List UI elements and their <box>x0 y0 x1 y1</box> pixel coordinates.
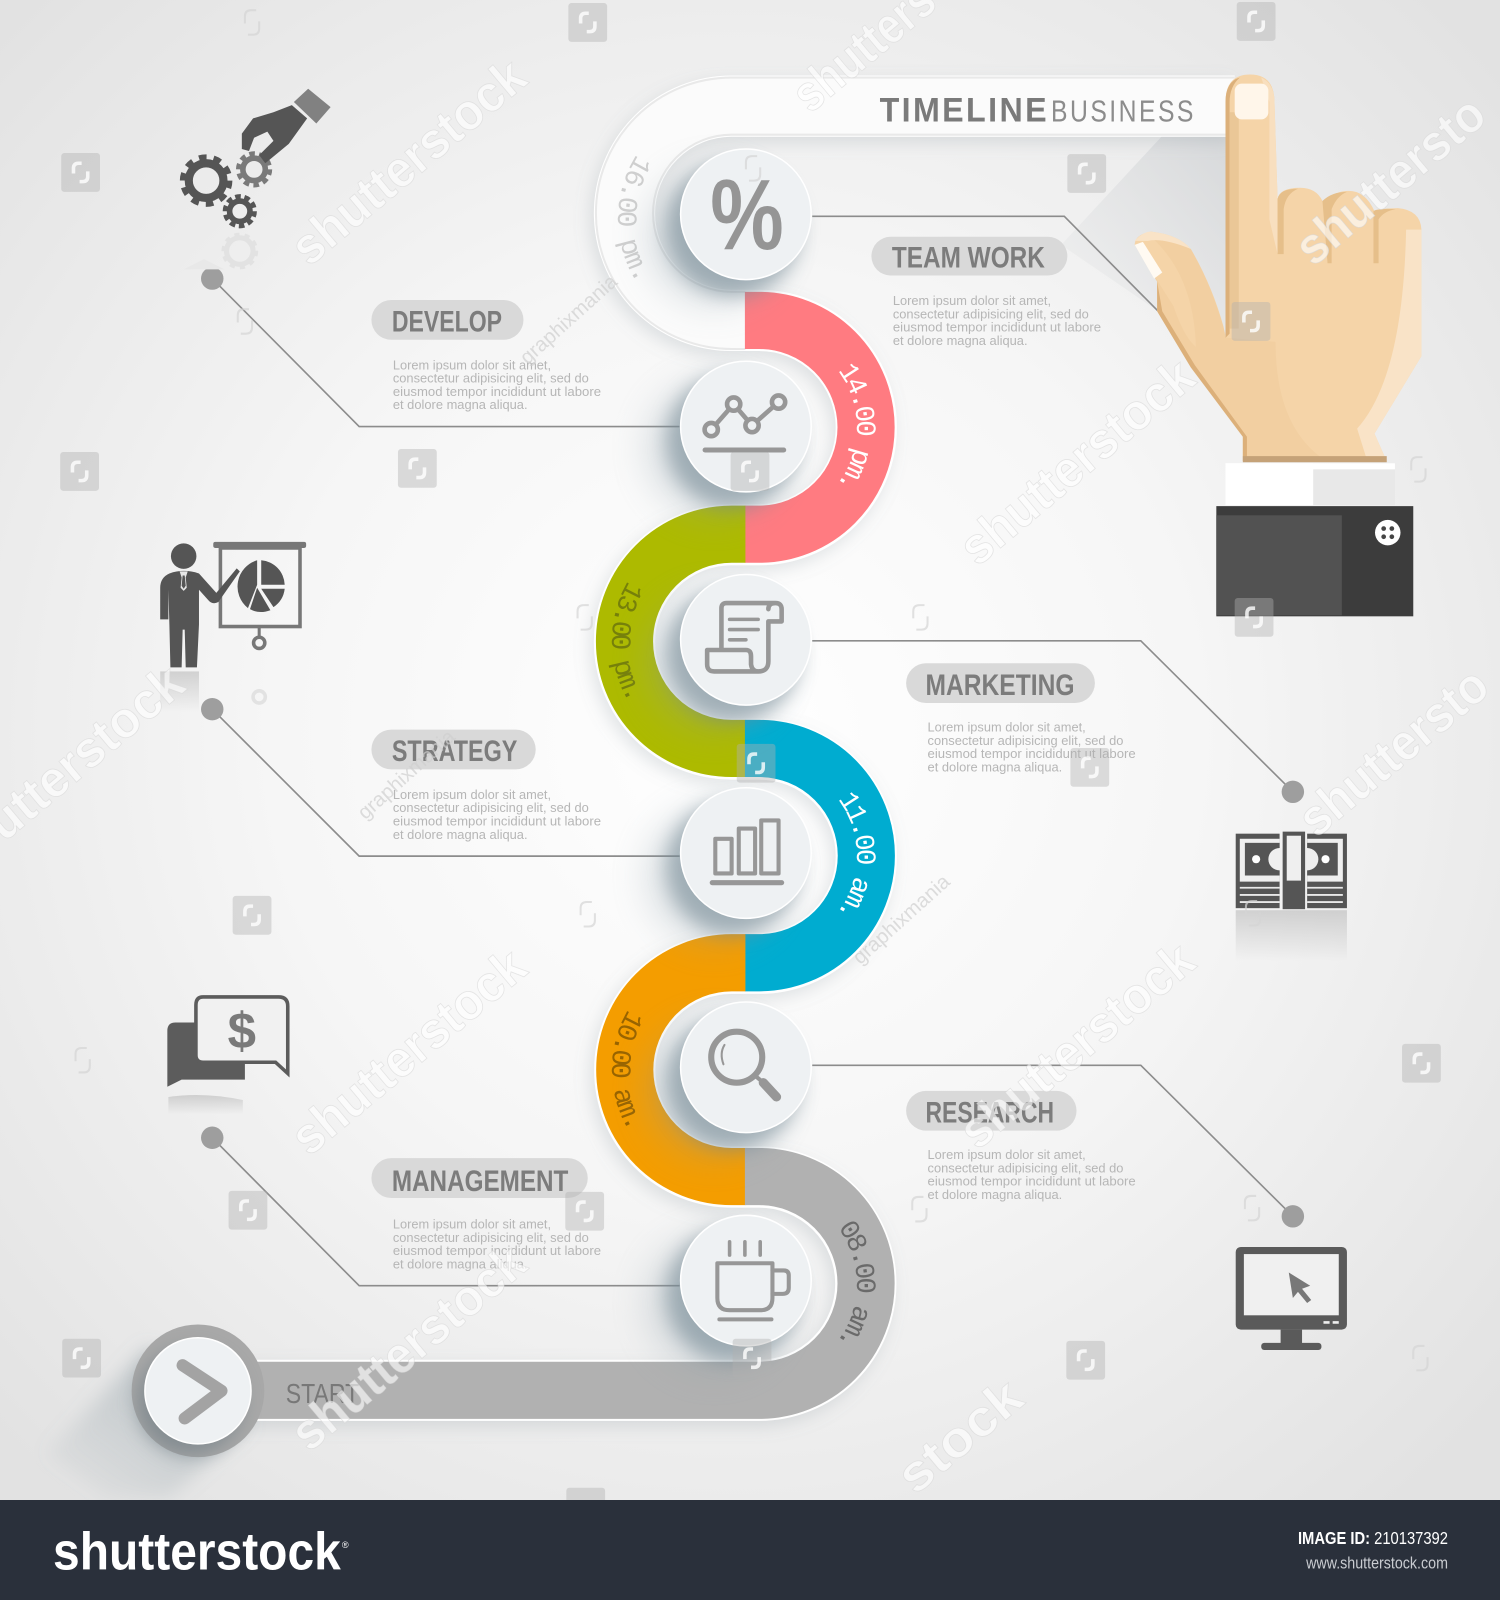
label: marketing: MARKETING <box>926 669 1074 702</box>
label: team work: et dolore magna aliqua. <box>893 333 1028 348</box>
title <box>880 91 1196 129</box>
circle: scroll document <box>647 574 811 730</box>
icon: gears and hand <box>183 89 331 269</box>
start label: START <box>286 1378 359 1409</box>
band: 16.00 pm <box>595 76 1234 350</box>
watermark text: stock <box>886 1367 1034 1504</box>
label: strategy: STRATEGY <box>392 735 518 768</box>
label: team work: TEAM WORK <box>892 241 1045 274</box>
start button <box>132 1324 264 1457</box>
label: management <box>371 1158 601 1271</box>
label: develop: eiusmod tempor incididunt ut labore <box>393 384 601 399</box>
start button long shadow <box>46 1347 250 1498</box>
band: 13.00 pm <box>596 506 746 777</box>
label: strategy: consectetur adipisicing elit, sed do <box>393 800 589 815</box>
watermark small text: graphixmania <box>354 725 460 824</box>
dot: research <box>1282 1205 1304 1228</box>
icon: monitor with cursor <box>1236 1247 1347 1350</box>
watermark small text <box>354 270 955 969</box>
circle: magnifier <box>647 1002 811 1157</box>
hand illustration <box>1135 74 1421 462</box>
label: research <box>906 1091 1136 1202</box>
dot: marketing <box>1282 781 1304 803</box>
circle: percent: % <box>710 159 784 271</box>
title: BUSINESS <box>1051 94 1196 128</box>
label: develop: Lorem ipsum dolor sit amet, <box>393 357 551 372</box>
label: strategy: Lorem ipsum dolor sit amet, <box>393 787 551 802</box>
icon: speech bubbles with dollar: $ <box>228 1002 256 1059</box>
label: marketing: et dolore magna aliqua. <box>928 759 1062 774</box>
label: develop: et dolore magna aliqua. <box>393 397 528 412</box>
watermark logo outlines <box>76 10 1428 1370</box>
watermark text: shutterstock <box>948 347 1206 576</box>
suit sleeve <box>1216 506 1413 616</box>
watermark text: shutterstock <box>948 930 1206 1159</box>
label: team work: consectetur adipisicing elit, sed do <box>893 306 1089 321</box>
circle: line chart <box>647 361 811 516</box>
title: TIMELINE <box>880 91 1049 129</box>
label: develop <box>371 300 601 412</box>
finger long shadow <box>1061 135 1230 337</box>
label: team work <box>871 237 1101 348</box>
watermark text: shutterstock <box>280 47 537 276</box>
label: strategy <box>371 730 601 842</box>
icon: presenter with pie chart board <box>160 542 306 712</box>
band: 11.00 am: 11.00 am. <box>839 792 876 912</box>
footer bar: shutterstock <box>53 1522 341 1581</box>
circle: percent <box>647 149 811 304</box>
band: 16.00 pm: 16.00 pm. <box>615 156 649 278</box>
label: management: Lorem ipsum dolor sit amet, <box>393 1217 551 1232</box>
label: management: consectetur adipisicing elit, sed do <box>393 1230 589 1245</box>
band: 08.00 am and start: 08.00 am. <box>840 1222 876 1340</box>
label: strategy: eiusmod tempor incididunt ut labore <box>393 814 601 829</box>
label: develop: DEVELOP <box>392 306 502 339</box>
circle: bar chart <box>647 788 811 943</box>
shirt cuff <box>1226 463 1395 505</box>
footer bar: IMAGE ID: 210137392 <box>1298 1528 1448 1548</box>
band: 10.00 am: 10.00 am. <box>612 1011 641 1126</box>
band: 14.00 pm: 14.00 pm. <box>839 364 876 483</box>
label: research: RESEARCH <box>926 1096 1054 1129</box>
label: strategy: et dolore magna aliqua. <box>393 827 528 842</box>
label: team work: Lorem ipsum dolor sit amet, <box>893 293 1051 308</box>
footer bar: www.shutterstock.com <box>1305 1554 1448 1572</box>
dot: develop <box>201 267 223 290</box>
footer bar <box>0 1500 1500 1600</box>
label: team work: eiusmod tempor incididunt ut labore <box>893 320 1101 335</box>
band: 10.00 am <box>596 934 746 1206</box>
label: management: et dolore magna aliqua. <box>393 1256 528 1271</box>
watermark text: shutterstock <box>280 937 537 1166</box>
watermark small text: graphixmania <box>849 870 955 969</box>
watermark text: shutterstock <box>280 1232 537 1461</box>
label: marketing: Lorem ipsum dolor sit amet, <box>928 720 1086 735</box>
dot: strategy <box>201 698 223 720</box>
label: management: MANAGEMENT <box>392 1165 568 1198</box>
band: 11.00 am <box>744 720 895 992</box>
label: marketing <box>906 663 1136 774</box>
icon: money stack <box>1236 832 1347 961</box>
timeline snake path <box>252 76 1234 1430</box>
footer bar: ® <box>342 1540 349 1550</box>
band: 14.00 pm <box>744 292 895 563</box>
label: research: eiusmod tempor incididunt ut labore <box>928 1174 1136 1189</box>
band: 13.00 pm: 13.00 pm. <box>608 582 640 698</box>
label: research: et dolore magna aliqua. <box>928 1187 1062 1202</box>
label: research: consectetur adipisicing elit, sed do <box>928 1160 1123 1175</box>
band: 08.00 am and start <box>258 1148 895 1419</box>
circle: coffee cup <box>647 1215 811 1370</box>
icon: speech bubbles with dollar <box>167 997 288 1114</box>
label: marketing: eiusmod tempor incididunt ut labore <box>928 746 1136 761</box>
leader lines <box>212 216 1293 1286</box>
label: marketing: consectetur adipisicing elit, sed do <box>928 733 1123 748</box>
label: management: eiusmod tempor incididunt ut labore <box>393 1243 601 1258</box>
label: develop: consectetur adipisicing elit, sed do <box>393 371 589 386</box>
watermark small text: graphixmania <box>516 270 622 369</box>
label: research: Lorem ipsum dolor sit amet, <box>928 1147 1086 1162</box>
dot: management <box>201 1127 223 1149</box>
